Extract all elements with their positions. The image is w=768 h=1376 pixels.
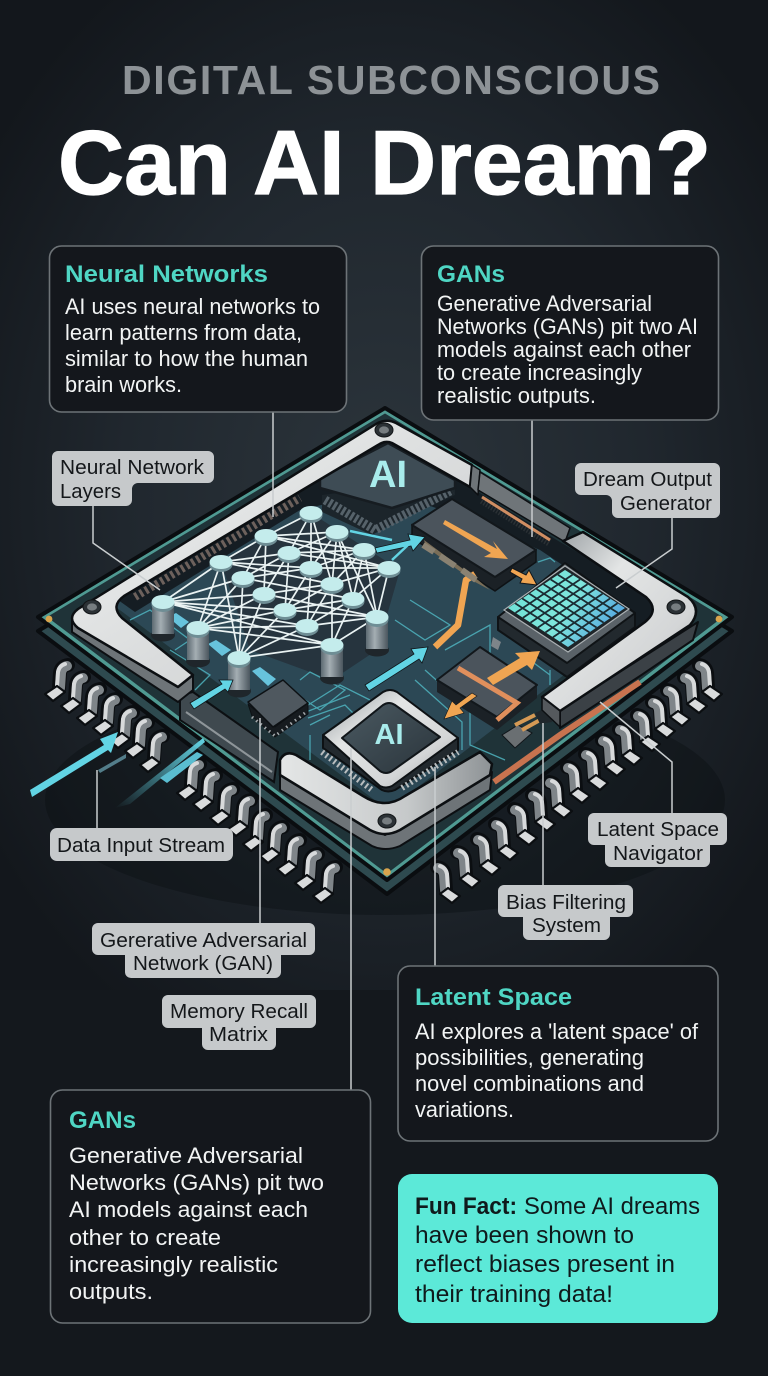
lower AI chip: [322, 690, 458, 792]
panel: GANs bottom: other to create: [69, 1225, 221, 1250]
label: Latent Space Navigator: [588, 813, 727, 867]
panel: Latent Space: variations.: [415, 1097, 514, 1122]
lower processor block: [437, 647, 540, 730]
panel: GANs bottom: GANs: [69, 1107, 136, 1134]
label: Latent Space Navigator: Navigator: [613, 843, 703, 865]
dark inner wall with component row: [118, 441, 658, 628]
panel: Latent Space: possibilities, generating: [415, 1045, 644, 1070]
panel: Latent Space: AI explores a 'latent space' of: [415, 1019, 699, 1044]
label: Memory Recall Matrix: [162, 995, 316, 1050]
orange heat band: [494, 682, 640, 782]
orange arrow into matrix: [510, 568, 537, 585]
panel: GANs top: Generative Adversarial: [437, 291, 652, 316]
panel: GANs top: realistic outputs.: [437, 383, 596, 408]
panel: Latent Space: [398, 966, 718, 1141]
panel: Neural Networks: similar to how the human: [65, 346, 308, 371]
panel: Neural Networks: [50, 246, 346, 412]
dream output memory matrix: [498, 563, 635, 677]
main title: Can AI Dream?: [58, 113, 711, 214]
callout: fun fact: their training data!: [415, 1281, 613, 1308]
panel: Latent Space: novel combinations and: [415, 1071, 644, 1096]
callout: fun fact: have been shown to: [415, 1222, 634, 1249]
orange arrow on processor: [443, 520, 508, 559]
chip illustration: [30, 408, 732, 915]
panel: GANs bottom: increasingly realistic: [69, 1252, 278, 1277]
label: Generative Adversarial Network: [92, 923, 315, 978]
panel: GANs top: to create increasingly: [437, 360, 642, 385]
AI text: AI: [369, 454, 407, 496]
bias filter components: [502, 706, 552, 748]
callout: fun fact: Some AI dreams: [524, 1193, 700, 1220]
panel: Neural Networks: learn patterns from data,: [65, 320, 302, 345]
orange trace: [435, 574, 475, 647]
panel: GANs bottom: [50, 1090, 370, 1323]
cyan connectors: [168, 613, 276, 686]
leader lines: [93, 412, 672, 1090]
panel: GANs bottom: outputs.: [69, 1279, 153, 1304]
callout: fun fact: [398, 1174, 718, 1323]
label: Latent Space Navigator: Latent Space: [597, 819, 719, 841]
callout: fun fact: reflect biases present in: [415, 1251, 675, 1278]
label: Memory Recall Matrix: Memory Recall: [170, 1001, 308, 1023]
panel: GANs top: [422, 246, 718, 420]
label: Data Input Stream: Data Input Stream: [57, 835, 225, 857]
neural network connections: [163, 513, 389, 658]
panel: Neural Networks: AI uses neural networks to: [65, 294, 320, 319]
silver frame: right piece: [542, 532, 698, 728]
panel: GANs bottom: Networks (GANs) pit two: [69, 1170, 324, 1195]
small components: [423, 545, 501, 650]
label: Data Input Stream: [50, 828, 233, 861]
orange arrow down-left: [444, 693, 477, 719]
label: Dream Output Generator: Generator: [620, 493, 712, 515]
panel: GANs bottom: AI models against each: [69, 1197, 308, 1222]
panel: Latent Space: Latent Space: [415, 984, 572, 1011]
panel: GANs top: GANs: [437, 261, 505, 288]
panel: Neural Networks: brain works.: [65, 372, 182, 397]
dark floor under network: [221, 513, 400, 680]
cyan arrows: [30, 531, 428, 808]
orange arrow up: [487, 651, 540, 685]
label: Bias Filtering System: [498, 885, 633, 940]
panel: GANs bottom: Generative Adversarial: [69, 1143, 303, 1168]
kicker heading: DIGITAL SUBCONSCIOUS: [122, 57, 660, 103]
silver frame: left piece: [72, 421, 570, 702]
panel: GANs top: models against each other: [437, 337, 691, 362]
label: Neural Network Layers: Layers: [60, 481, 121, 503]
GAN processor block: [412, 499, 536, 591]
silver frame: bottom piece: [280, 752, 492, 849]
inner circuit area: [113, 443, 655, 810]
AI text lower chip: AI: [374, 719, 404, 751]
label: Bias Filtering System: Bias Filtering: [506, 892, 626, 914]
panel: GANs top: Networks (GANs) pit two AI: [437, 314, 698, 339]
label: Bias Filtering System: System: [532, 915, 601, 937]
circuit board base: [38, 408, 732, 894]
small memory chip: [248, 680, 308, 737]
pins: lower right: [437, 664, 722, 903]
label: Dream Output Generator: Dream Output: [583, 469, 712, 491]
circuit traces: [130, 558, 555, 760]
label: Neural Network Layers: [52, 451, 214, 506]
label: Neural Network Layers: Neural Network: [60, 457, 205, 479]
label: Generative Adversarial Network: Network (GAN): [133, 953, 273, 975]
data input arrow: [30, 732, 118, 797]
inner gray wall lower left: [180, 692, 278, 782]
pins: lower left: [45, 664, 336, 903]
panel: Neural Networks: Neural Networks: [65, 261, 268, 288]
label: Dream Output Generator: [575, 463, 720, 518]
callout: fun fact: Fun Fact:: [415, 1193, 517, 1220]
neural network nodes: [151, 506, 400, 698]
label: Generative Adversarial Network: Gererative Adversarial: [100, 930, 307, 952]
top AI hexagon chip: [320, 443, 455, 535]
label: Memory Recall Matrix: Matrix: [209, 1024, 268, 1046]
title block: [58, 57, 711, 214]
